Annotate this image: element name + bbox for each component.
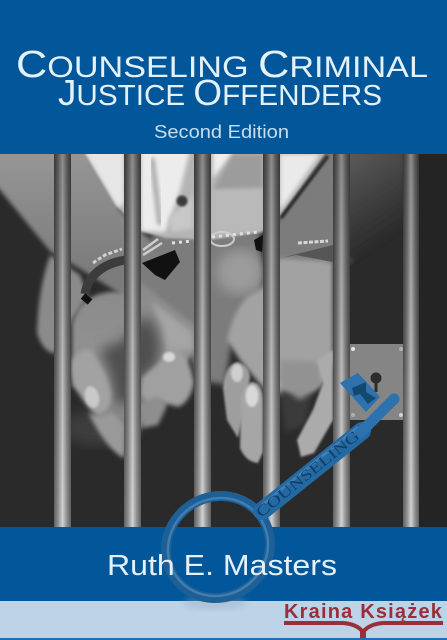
title <box>16 44 428 113</box>
left finger upper <box>141 348 194 407</box>
nail a <box>231 364 243 382</box>
title: JUSTICE OFFENDERS <box>58 72 382 113</box>
left palm <box>72 283 195 457</box>
photo: prisoner hands behind bars <box>0 150 447 527</box>
prison bars <box>54 154 419 527</box>
logo book underline <box>284 623 443 638</box>
right palm <box>227 258 333 400</box>
key collar <box>360 399 394 433</box>
lock plate <box>349 344 403 420</box>
finger b <box>240 382 263 463</box>
key ring <box>146 476 290 618</box>
right sleeve <box>350 154 403 262</box>
left finger nail <box>163 352 175 362</box>
finger a <box>223 362 250 438</box>
palm lower crease <box>280 390 312 432</box>
right hand <box>223 258 333 463</box>
light footer band <box>0 601 447 638</box>
title: COUNSELING CRIMINAL <box>16 44 428 86</box>
left cupped shadow <box>100 315 160 405</box>
shirt <box>83 150 328 240</box>
left finger lower <box>141 397 166 428</box>
handcuffs <box>83 232 333 302</box>
shirt button <box>176 196 188 206</box>
thumb nail <box>84 386 100 408</box>
right edge dark <box>419 154 447 527</box>
left wrist <box>37 255 88 354</box>
top blue panel <box>0 0 447 154</box>
keyhole <box>370 372 382 384</box>
edition label: Second Edition <box>154 121 289 142</box>
key lettering: COUNSELING <box>253 428 363 521</box>
key shaft <box>262 431 362 511</box>
seller logo text: Kraina Książek <box>284 601 443 623</box>
right thumb <box>297 350 333 457</box>
left thumb <box>72 350 111 414</box>
hand shadow <box>71 410 106 446</box>
key <box>146 373 394 618</box>
photo background <box>0 154 447 527</box>
bottom blue panel <box>0 527 447 601</box>
collar shadow <box>281 156 328 218</box>
nail b <box>246 385 258 407</box>
key bit <box>340 373 380 412</box>
left hand <box>37 255 195 458</box>
palm shading <box>150 300 193 352</box>
centre torso <box>150 228 262 385</box>
author name: Ruth E. Masters <box>107 550 337 582</box>
key ring shadow <box>183 596 247 610</box>
left arm <box>0 154 174 309</box>
heel of left hand <box>88 412 124 458</box>
right arm <box>280 154 354 264</box>
